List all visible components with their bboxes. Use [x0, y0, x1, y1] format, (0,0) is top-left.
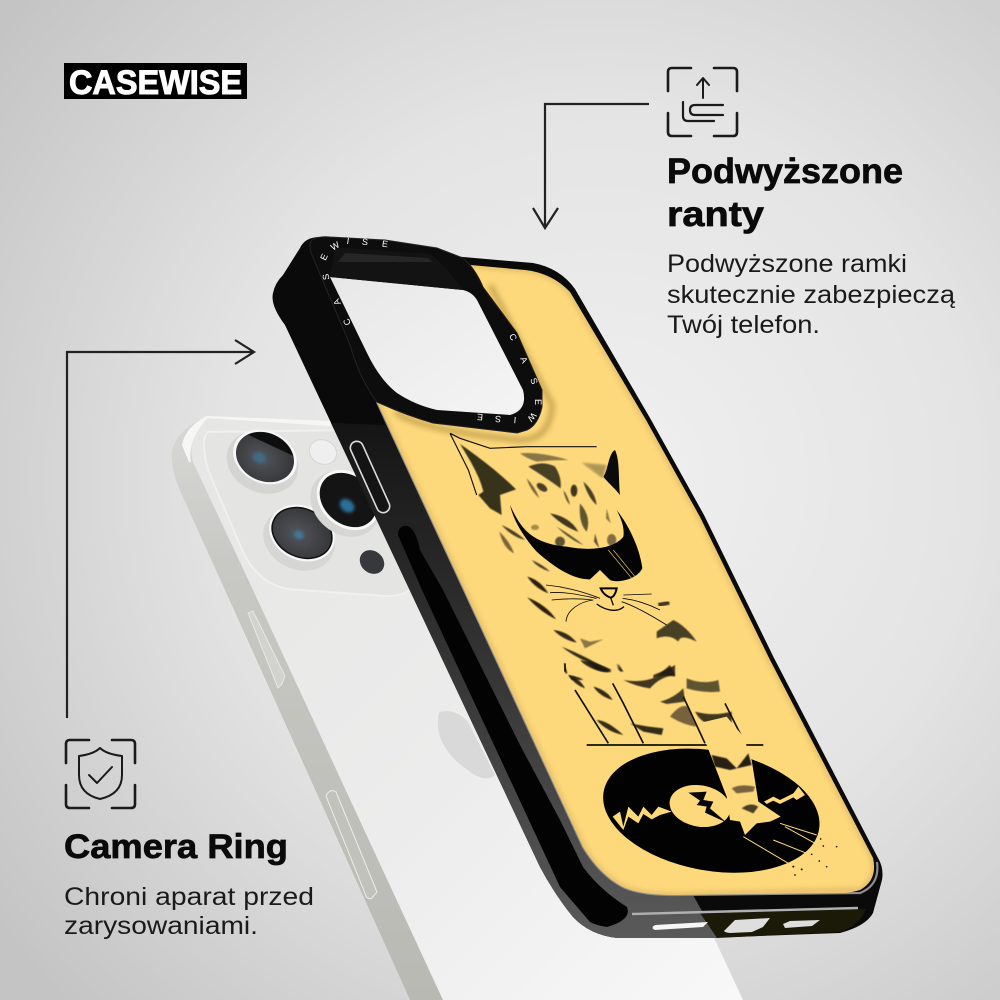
cat illustration: [450, 433, 697, 680]
heading: camera ring: Camera Ring: [64, 828, 288, 866]
side button on case: [348, 439, 392, 515]
icon: shield: [66, 740, 135, 808]
port usb: [724, 918, 770, 933]
ring: [310, 237, 542, 433]
lens 1: [216, 418, 310, 505]
lens 2: [253, 493, 347, 582]
left ear: [460, 444, 516, 515]
ring lettering: E: [381, 239, 389, 249]
ring lettering: A: [331, 297, 343, 307]
camera plateau: [204, 430, 410, 596]
vinyl disc: [593, 733, 829, 889]
heading: raised edges: ranty: [667, 195, 765, 234]
whisker tip fur: [658, 603, 669, 605]
cat leg: [698, 717, 781, 835]
cat body lines: [565, 663, 763, 745]
ring lettering: I: [513, 415, 517, 425]
ring inner dark top: [330, 248, 463, 290]
sunglasses glint: [608, 550, 635, 578]
left side black slot: [398, 526, 628, 927]
sensor: [355, 545, 389, 579]
camera ring: [310, 236, 552, 440]
phone body: [172, 417, 743, 1000]
port speaker: [652, 922, 708, 930]
phone case: [272, 237, 882, 938]
nose: [601, 588, 617, 598]
ring window: [330, 277, 524, 415]
lightning bolt: [688, 792, 727, 823]
ring lettering: E: [477, 412, 483, 422]
vinyl record and paw: [565, 660, 837, 889]
ring lettering: S: [528, 376, 540, 386]
right ear: [603, 450, 620, 495]
ring lettering: S: [361, 237, 369, 247]
ring lettering: C: [507, 332, 519, 343]
panel edge shadow: [377, 265, 874, 895]
ring lettering: S: [321, 273, 331, 281]
ring lettering: I: [346, 236, 350, 246]
side button lower: [326, 791, 377, 899]
text: raised edges description: Twój telefon.: [667, 311, 820, 339]
head outline: [450, 433, 597, 495]
ring inner highlight: [338, 253, 433, 262]
ring lettering: W: [525, 411, 539, 424]
case shell: [272, 237, 882, 938]
text: camera ring description: Chroni aparat przed: [64, 883, 314, 911]
arrow: top callout to raised edges: [533, 104, 649, 228]
ring lettering: W: [329, 239, 342, 252]
ring lettering: S: [495, 414, 501, 424]
apple logo: [438, 711, 495, 778]
ring lettering: E: [533, 399, 543, 405]
scratch lines: [743, 823, 817, 863]
arrow: camera ring callout: [67, 340, 254, 718]
white phone behind the case: [172, 417, 743, 1000]
rim lines around back panel: [377, 402, 877, 895]
whiskers: [546, 585, 667, 625]
record label: [666, 780, 734, 832]
ring lettering: E: [318, 252, 330, 262]
ring shadow: [395, 285, 552, 440]
mouth: [597, 598, 624, 610]
brand logo: CASEWISE: [69, 64, 242, 102]
translucent left side over phone: [331, 402, 717, 938]
cheek and chest fur: [499, 525, 697, 680]
port mic: [783, 920, 820, 928]
right ear shade: [582, 463, 607, 478]
text: raised edges description: skutecznie zabezpieczą: [667, 281, 955, 309]
phone corner highlight: [183, 417, 330, 462]
groove wave left: [613, 807, 672, 830]
ring lettering: A: [518, 355, 530, 365]
text: raised edges description: Podwyższone ramki: [667, 250, 907, 278]
text: camera ring description: zarysowaniami.: [64, 912, 258, 940]
heading: raised edges: Podwyższone: [667, 152, 903, 191]
head fur marks: [520, 453, 616, 548]
sunglasses: [510, 505, 642, 581]
icon: raised edges: [668, 68, 737, 136]
leg stripes: [712, 753, 758, 813]
ring lettering: C: [341, 316, 353, 327]
phone side band: [172, 417, 443, 1000]
bottom lip highlight: [632, 908, 858, 914]
cat body stripes: [568, 660, 732, 735]
flash: [305, 435, 341, 469]
bottom dark olive edge: [700, 909, 866, 938]
vinyl dust: [792, 838, 837, 876]
ring lettering: [318, 236, 543, 425]
side button upper: [248, 611, 285, 688]
groove wave right: [764, 787, 805, 804]
lens 3: [297, 456, 394, 551]
yellow back panel: [377, 265, 874, 895]
